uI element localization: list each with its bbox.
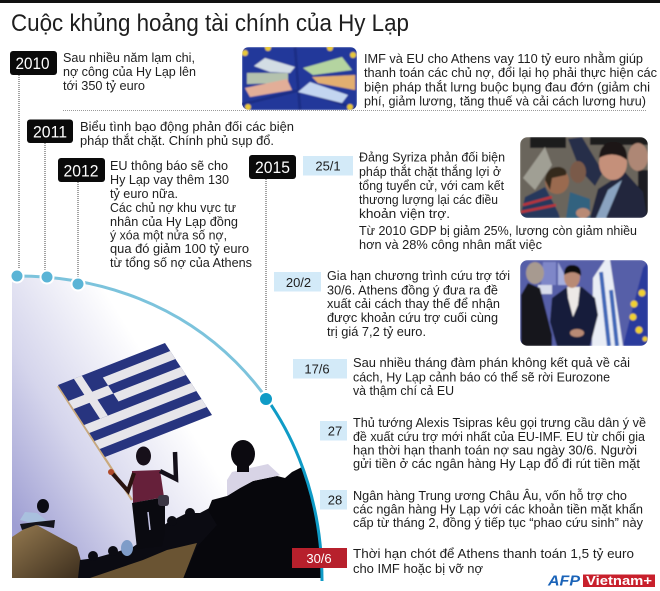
text IMF EU loan: biện pháp thắt lưng buộc bụng đau đớn (giảm chi (364, 80, 650, 94)
crowd (78, 508, 217, 578)
text 2012: nhân của Hy Lạp đồng (110, 215, 238, 229)
text 28 (353, 488, 644, 530)
date 20/2: 20/2 (286, 275, 311, 290)
text 25/1 (359, 150, 505, 221)
text 28: Ngân hàng Trung ương Châu Âu, vốn hỗ trợ cho (353, 488, 627, 503)
text 27: Thủ tướng Alexis Tsipras kêu gọi trưng cầu dân ý về (353, 416, 646, 430)
text 25/1: Đảng Syriza phản đối biện (359, 150, 505, 164)
text 25/1: tổng tuyển cử, với cam kết (359, 179, 505, 193)
right dark crowd (183, 467, 322, 579)
text GDP: Từ 2010 GDP bị giảm 25%, lương còn giảm nhiều (359, 224, 637, 238)
text 30/6: Thời hạn chót để Athens thanh toán 1,5 tỷ euro (353, 547, 634, 561)
text 2012: ý xóa một nửa số nợ, (110, 228, 227, 242)
woman holding flag (108, 446, 176, 549)
date 28: 28 (328, 492, 342, 508)
left stone pillar (12, 523, 85, 578)
timeline dots (10, 270, 273, 406)
text 17/6: Sau nhiều tháng đàm phán không kết quả về cải (353, 356, 630, 370)
year 2011 (27, 120, 73, 143)
timeline arc (17, 276, 322, 581)
text 20/2: 30/6. Athens đồng ý đưa ra đề (327, 284, 498, 298)
text 30/6: cho IMF hoặc bị vỡ nợ (353, 562, 483, 576)
text 27 (353, 416, 646, 471)
text 2012: tỷ euro nữa. (110, 187, 178, 201)
man in white shirt (227, 440, 280, 496)
flag pole (58, 386, 132, 500)
text IMF EU loan: thanh toán các chủ nợ, đổi lại họ phải thực hiện các (364, 66, 657, 80)
text 25/1: khoản viện trợ. (359, 207, 450, 221)
text 2010 (63, 51, 196, 93)
text 2012: Hy Lạp vay thêm 130 (110, 173, 229, 187)
text 25/1: thương lượng lại các điều (359, 193, 498, 207)
text 2010: Sau nhiều năm lạm chi, (63, 51, 195, 65)
text 20/2: xuất cải cách thay thế để nhận (327, 297, 500, 311)
date 30/6 deadline: 30/6 (306, 551, 332, 566)
text 2012: từ tổng số nợ của Athens (110, 256, 252, 270)
text 27: gửi tiền ở các ngân hàng Hy Lạp đổ đi rút tiền mặt (353, 457, 641, 471)
text IMF EU loan (364, 51, 657, 108)
text 17/6: cách, Hy Lạp cảnh báo có thể sẽ rời Eurozone (353, 370, 610, 384)
year 2015 (249, 155, 296, 179)
text 20/2: Gia hạn chương trình cứu trợ tới (327, 269, 510, 283)
date 17/6 (293, 359, 347, 378)
photo: Tsipras in crowd (520, 137, 648, 218)
logo: AFP Vietnam+: AFP (547, 572, 581, 590)
year 2011: 2011 (33, 122, 67, 142)
top black bar (0, 0, 660, 3)
text GDP: hơn và 28% công nhân mất việc (359, 238, 542, 252)
text 20/2: được khoản cứu trợ cuối cùng (327, 311, 498, 325)
year 2012 (58, 158, 105, 182)
date 30/6 deadline (292, 548, 347, 568)
text 2010: nợ công của Hy Lạp lên (63, 65, 196, 79)
text 27: hạn thời hạn thanh toán nợ sau ngày 30/6. Người (353, 444, 637, 458)
left man (20, 499, 55, 530)
text 17/6: và thậm chí cả EU (353, 384, 454, 398)
text 2012: Các chủ nợ khu vực tư (110, 201, 236, 215)
text 20/2: trị giá 7,2 tỷ euro. (327, 325, 426, 339)
text 2012: EU thông báo sẽ cho (110, 159, 228, 173)
text 2011: Biểu tình bạo động phản đối các biện (80, 120, 294, 134)
text 28: cấp từ tháng 2, đồng ý tiếp tục “phao cứu sinh” này (353, 516, 644, 530)
photo: Juncker and Tsipras (520, 260, 648, 346)
text IMF EU loan: IMF và EU cho Athens vay 110 tỷ euro nhằm giúp (364, 51, 643, 66)
text 2012 (110, 159, 252, 270)
date 17/6: 17/6 (304, 362, 330, 376)
text 17/6 (353, 356, 630, 398)
year 2012: 2012 (64, 162, 98, 180)
title: Cuộc khủng hoảng tài chính của Hy Lạp (11, 10, 409, 37)
year 2015: 2015 (255, 158, 290, 177)
text 25/1: pháp thắt chặt thắng lợi ở (359, 164, 501, 179)
stone wall (87, 543, 197, 579)
logo: AFP Vietnam+: Vietnam+ (586, 574, 652, 588)
logo: AFP Vietnam+ (547, 572, 655, 590)
text 2010: tới 350 tỷ euro (63, 79, 145, 93)
date 25/1 (303, 156, 353, 176)
date 25/1: 25/1 (315, 158, 341, 174)
text 27: đề xuất cứu trợ mới nhất của EU-IMF. EU từ chối gia (353, 430, 645, 444)
year 2010: 2010 (16, 54, 50, 73)
text 20/2 (327, 269, 510, 339)
text 28: các ngân hàng Hy Lạp với các khoản tiền mặt khẩn (353, 502, 643, 516)
text 30/6 (353, 547, 634, 576)
photo: Greek flag and protesters (12, 276, 324, 579)
photo: euro notes (240, 45, 360, 110)
year 2010 (10, 51, 57, 75)
text 2012: qua đó giảm 100 tỷ euro (110, 242, 249, 256)
text 2011 (80, 120, 294, 148)
dotted leader lines (19, 75, 266, 393)
date 27: 27 (328, 424, 342, 438)
date 20/2 (274, 272, 321, 292)
date 27 (320, 421, 347, 440)
date 28 (320, 490, 347, 510)
Greek flag (58, 343, 212, 457)
text 2011: pháp thắt chặt. Chính phủ sụp đổ. (80, 133, 274, 148)
text GDP (359, 224, 637, 252)
text IMF EU loan: phí, giảm lương, tăng thuế và cải cách lương hưu) (364, 94, 646, 108)
